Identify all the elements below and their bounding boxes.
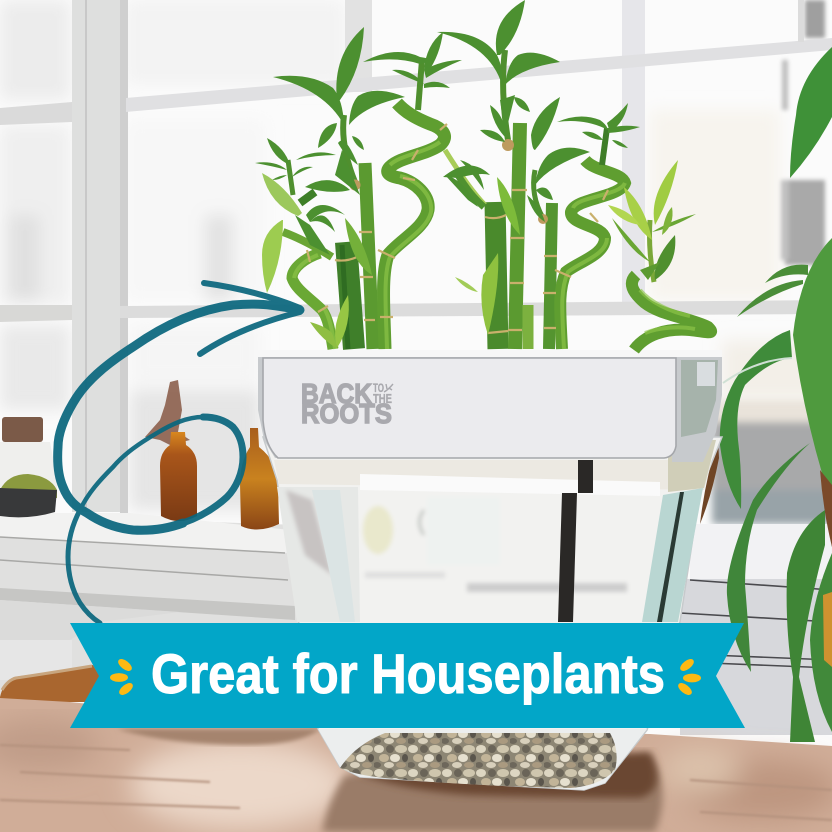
stem highlights [294, 142, 695, 349]
rim [274, 460, 712, 490]
window sill and wall [0, 513, 832, 735]
aquaponic tank [258, 350, 722, 790]
leaf: long left [720, 330, 792, 509]
pebbles [340, 733, 617, 788]
right sparkle [676, 657, 701, 697]
left refraction [277, 487, 360, 622]
blurred buildings through the window [781, 0, 825, 265]
leaf: edge [810, 553, 832, 732]
bottom of tank [318, 729, 647, 790]
right houseplant [700, 47, 832, 742]
logo: Back to the Roots: TO [373, 381, 384, 395]
wooden table [0, 698, 832, 832]
amber bottle right [240, 428, 279, 530]
tank glass body [263, 437, 722, 790]
logo: Back to the Roots: ROOTS [301, 398, 392, 429]
decor: moss jar on the sill [0, 417, 57, 517]
leaf: long lower [727, 443, 810, 672]
stem rings [307, 124, 608, 333]
wooden bench [0, 665, 100, 702]
white lid [258, 350, 722, 462]
bamboo plant [255, 0, 711, 350]
leaf: lower right [787, 510, 825, 742]
logo: Back to the Roots: BACK [301, 378, 372, 409]
leaf: tall center [793, 238, 832, 547]
ribbon [70, 623, 745, 728]
dark bamboo leaves [255, 0, 640, 255]
black wick [558, 460, 593, 622]
leaf: upper right [790, 47, 832, 178]
bamboo stems [283, 50, 711, 350]
logo: Back to the Roots [301, 378, 393, 429]
cup and objects seen through water [363, 497, 627, 592]
banner: Great for Houseplants [70, 623, 745, 728]
right refraction [642, 488, 703, 622]
leaf: brown droop [700, 440, 719, 524]
thin leaves [737, 265, 808, 317]
headline: Great for Houseplants [151, 642, 665, 705]
left sparkle [110, 657, 135, 697]
logo: Back to the Roots: THE [373, 391, 392, 406]
curved arrow pointing to the plant [58, 283, 300, 623]
window frames [0, 0, 832, 515]
amber bottle left [145, 380, 197, 521]
light green leaves [262, 160, 696, 349]
